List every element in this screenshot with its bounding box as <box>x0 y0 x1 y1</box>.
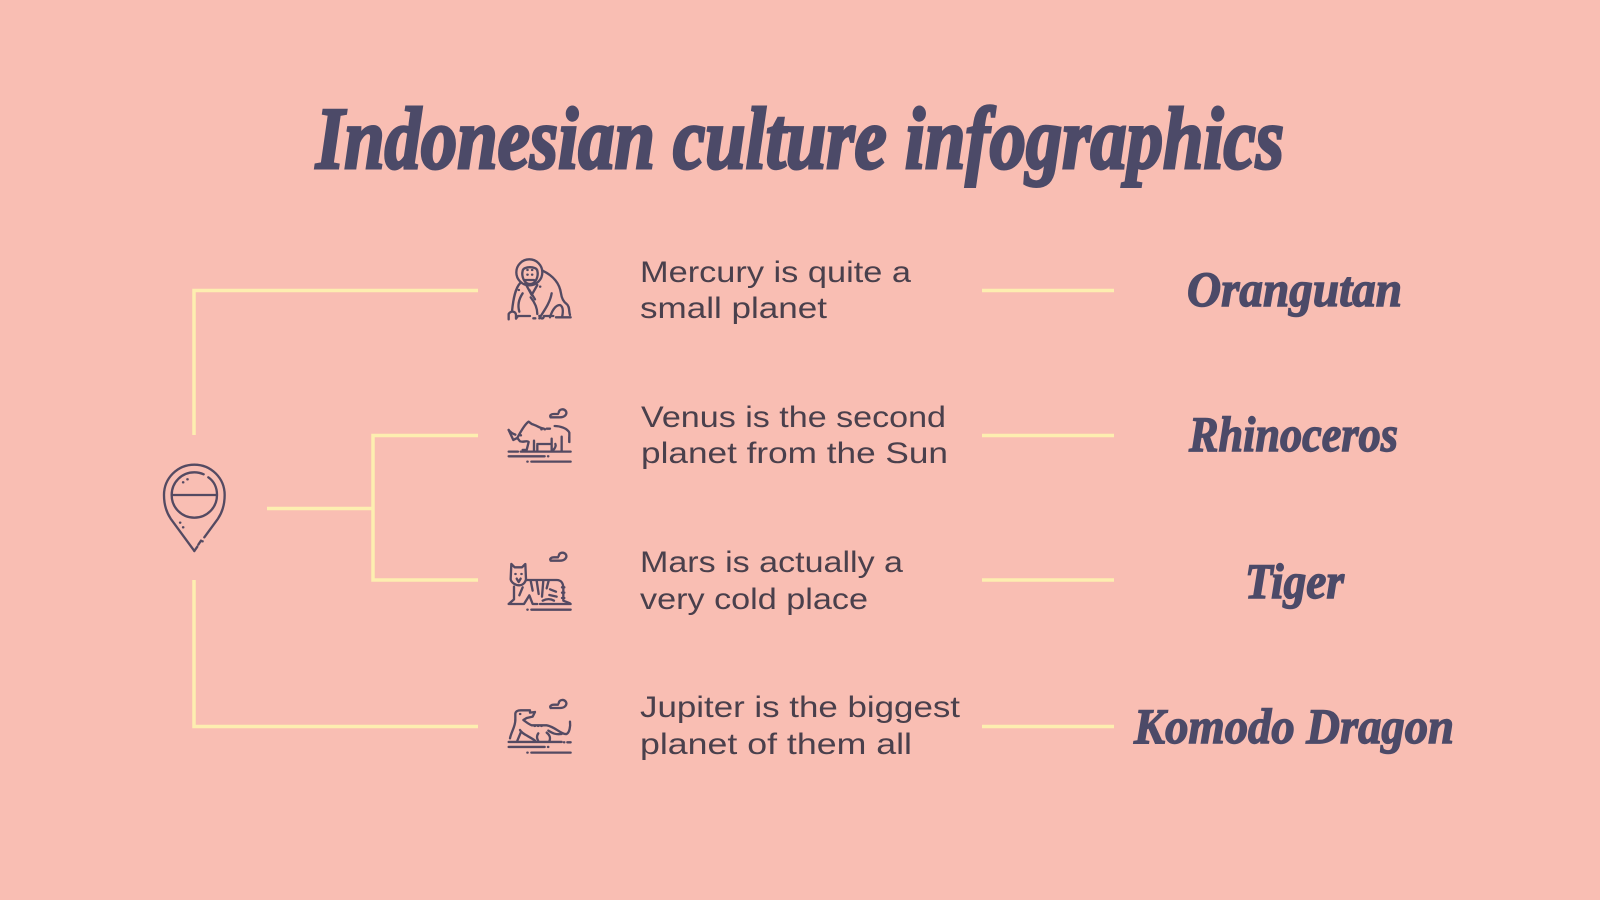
icon: orangutan <box>509 259 571 319</box>
icon: rhinoceros <box>509 409 571 462</box>
row 4 description: Jupiter is the biggest <box>640 691 961 724</box>
row 1 description <box>640 256 911 325</box>
row 3 description: Mars is actually a <box>640 546 903 579</box>
label: Orangutan: Orangutan <box>1187 261 1402 317</box>
row 2 description: Venus is the second <box>641 401 946 434</box>
icon: map pin <box>164 465 225 551</box>
label: Tiger: Tiger <box>1245 553 1344 609</box>
row 4 description <box>640 691 961 761</box>
row 2 description <box>641 401 948 470</box>
row 1 description: Mercury is quite a <box>640 256 911 289</box>
row 2 description: planet from the Sun <box>641 437 948 470</box>
label: Komodo Dragon: Komodo Dragon <box>1133 698 1454 754</box>
icon: komodo dragon <box>509 700 571 753</box>
label: Rhinoceros: Rhinoceros <box>1188 406 1398 462</box>
icon: tiger <box>509 553 571 610</box>
row 3 description: very cold place <box>640 583 868 616</box>
row 4 description: planet of them all <box>640 728 912 761</box>
row 3 description <box>640 546 903 616</box>
title: Indonesian culture infographics <box>315 91 1284 188</box>
row 1 description: small planet <box>640 292 828 325</box>
connector tree <box>194 290 1114 726</box>
